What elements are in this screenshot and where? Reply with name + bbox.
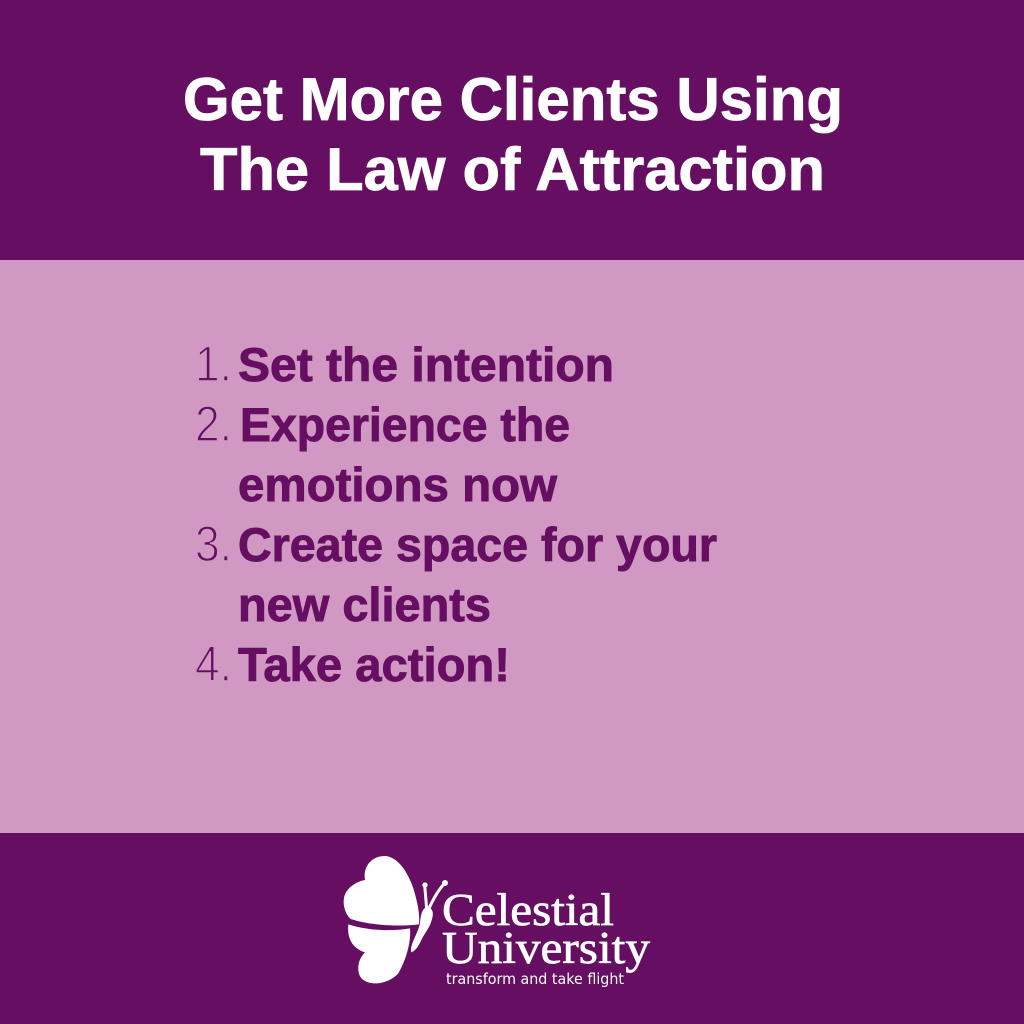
item 3: Create space for your [238, 518, 717, 571]
item 2 [195, 396, 570, 511]
title: Get More Clients Using [183, 66, 843, 133]
panel: list background [0, 260, 1024, 833]
item 4: 4. [195, 636, 232, 692]
item 2: emotions now [238, 458, 557, 511]
title [183, 66, 843, 203]
logo name: University [442, 923, 651, 973]
logo tagline: transform and take flight [446, 970, 624, 988]
item 3 [195, 516, 717, 631]
numbered list [195, 336, 717, 692]
header band [0, 0, 1024, 260]
logo name: Celestial [442, 885, 614, 935]
logo [344, 856, 651, 988]
item 1: Set the intention [238, 338, 614, 391]
item 1: 1. [195, 336, 232, 392]
logo name [442, 885, 651, 973]
item 3: 3. [195, 516, 232, 572]
item 3: new clients [238, 578, 491, 631]
item 4: Take action! [238, 638, 510, 691]
icon: butterfly [344, 856, 448, 983]
title: The Law of Attraction [200, 136, 825, 203]
item 2: Experience the [240, 398, 570, 451]
footer band [0, 833, 1024, 1024]
item 2: 2. [195, 396, 232, 452]
